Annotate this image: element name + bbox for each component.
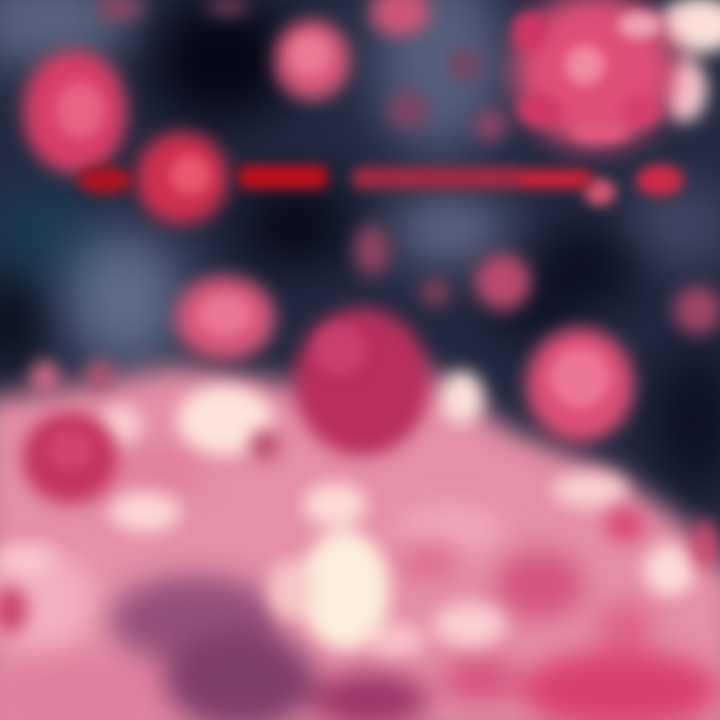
dark background [0, 0, 720, 495]
red horizontal band [77, 165, 592, 194]
pink foreground mass [0, 365, 720, 720]
top-right virus cluster [513, 0, 677, 148]
cluster details [48, 11, 684, 470]
light and shadow patches on the foreground [0, 445, 720, 720]
